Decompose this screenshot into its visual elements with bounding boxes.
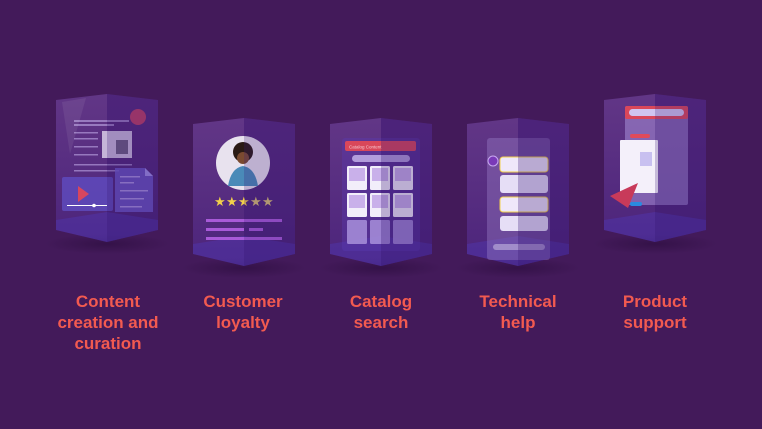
card: content creation	[45, 94, 169, 254]
icon: red circle	[130, 109, 146, 125]
chat bubbles	[488, 156, 548, 250]
image: photo	[102, 131, 132, 158]
document	[620, 140, 658, 193]
stars	[214, 194, 274, 209]
label: product support: Product	[623, 292, 687, 311]
label: content creation: creation and	[57, 313, 159, 332]
label: content creation: Content	[76, 292, 140, 311]
stars: ★	[214, 194, 226, 209]
card: customer loyalty	[182, 118, 306, 278]
header bar	[625, 106, 688, 119]
icon: cursor arrow	[610, 183, 638, 208]
label: catalog search: Catalog	[350, 292, 412, 311]
video player	[62, 177, 113, 211]
card: technical help	[456, 118, 580, 278]
label: customer loyalty: loyalty	[216, 313, 270, 332]
label: customer loyalty: Customer	[203, 292, 283, 311]
label: product support: support	[623, 313, 687, 332]
document	[115, 168, 153, 212]
labels	[57, 292, 687, 353]
card: catalog search: Catalog Content	[349, 144, 382, 150]
photo: portrait	[216, 136, 270, 190]
header bar	[345, 141, 416, 151]
label: technical help: Technical	[479, 292, 557, 311]
stars: ★	[250, 194, 262, 209]
card: product support	[593, 94, 717, 254]
card: catalog search	[319, 118, 443, 278]
label: content creation: curation	[74, 334, 142, 353]
stars: ★	[226, 194, 238, 209]
label: technical help: help	[501, 313, 535, 332]
stars: ★	[238, 194, 250, 209]
product grid	[347, 166, 413, 217]
stars: ★	[262, 194, 274, 209]
label: catalog search: search	[354, 313, 408, 332]
